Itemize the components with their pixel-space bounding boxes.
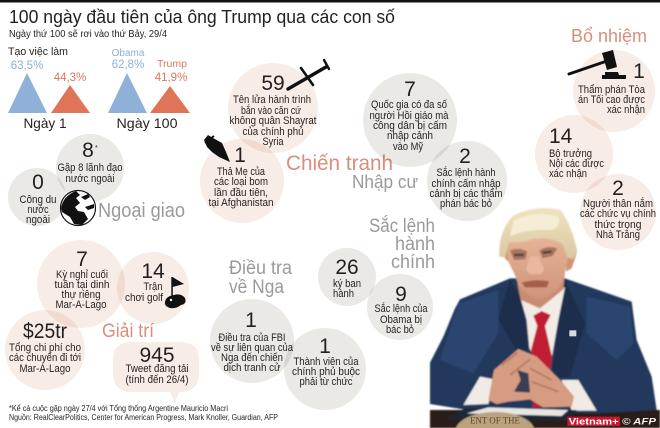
panel: orders signed: hành — [333, 288, 354, 300]
panel: relatives: Nhà Trắng — [596, 228, 640, 241]
desk — [430, 410, 660, 428]
panel: FBI investigation — [210, 299, 294, 383]
footnote and sources: Nguồn: RealClearPolitics, Center for American Progress, Mark Knoller, Guardian, AFP — [9, 413, 278, 422]
heading: executive orders: hành — [395, 234, 435, 255]
panel: blocked orders: Sắc lệnh hành — [436, 166, 496, 179]
panel: foreign trips: ngoài — [26, 214, 50, 226]
panel: Mar-A-Lago cost — [5, 310, 85, 390]
panel: tweets: Tweet đăng tải — [126, 363, 188, 375]
Obama label: Obama — [112, 48, 145, 59]
panel: foreign trips — [8, 168, 66, 226]
day 1 Trump triangle — [51, 85, 90, 113]
panel: immigration ban countries: công dân bị cấm — [373, 120, 447, 132]
panel: foreign trips: Công du — [20, 194, 56, 206]
panel: resigned official: Thành viên của — [294, 356, 359, 368]
chart heading: Tạo việc làm — [8, 46, 68, 58]
panel: supreme court: xác nhận — [607, 104, 645, 116]
panel: supreme court: Thẩm phán Tòa — [578, 84, 646, 96]
suit jacket — [430, 278, 657, 413]
panel: Obama orders reversed — [367, 274, 433, 340]
hair highlight — [510, 214, 559, 236]
title: 100 ngày đầu tiên của ông Trump qua các con số — [9, 7, 395, 27]
panel: cruise missiles: không quân Shayrat — [230, 115, 316, 127]
panel: FBI investigation: Nga đến chiến — [221, 352, 283, 364]
panel: Mother of All Bombs — [200, 139, 284, 223]
panel: cabinet: xác nhận — [549, 168, 587, 180]
panel: relatives: thức trong — [594, 219, 642, 231]
panel: orders signed — [318, 248, 376, 306]
gap between fingers — [514, 370, 530, 393]
panel: Mother of All Bombs: lần đầu tiên, — [214, 187, 268, 199]
panel: Mar-A-Lago cost: $25tr — [23, 320, 67, 343]
necktie — [531, 311, 552, 407]
panel: Obama orders reversed: bác bỏ — [386, 324, 414, 336]
panel: Mar-A-Lago weekends — [37, 240, 125, 328]
panel: blocked orders: cảnh bị các thẩm — [430, 188, 502, 200]
panel: blocked orders: 2 — [459, 145, 471, 168]
presidential seal — [456, 412, 534, 428]
panel: resigned official: phải từ chức — [300, 376, 353, 388]
panel: FBI investigation: 1 — [245, 309, 257, 332]
panel: tweets — [113, 342, 199, 403]
panel: cruise missiles: Syria — [262, 136, 284, 148]
panel: Mar-A-Lago weekends: thự riêng — [62, 289, 100, 301]
left shirt cuff — [463, 377, 495, 405]
lapel pin — [569, 330, 576, 336]
Trump label: Trump — [157, 58, 187, 70]
heading: immigration: Nhập cư — [352, 172, 418, 192]
panel: Mother of All Bombs: tại Afghanistan — [208, 197, 274, 209]
Obama day 1 value: 63,5% — [11, 60, 43, 72]
heading: Russia investigation: về Nga — [229, 277, 284, 298]
icon: globe — [60, 190, 96, 226]
panel: foreign leaders met: * — [95, 145, 98, 152]
panel: cabinet: Bộ trưởng — [549, 148, 592, 160]
neck — [517, 272, 565, 308]
panel: Mar-A-Lago weekends: 7 — [76, 248, 88, 271]
panel: relatives: 2 — [612, 177, 624, 200]
panel: resigned official — [284, 328, 366, 410]
heading: diplomacy: Ngoại giao — [98, 200, 185, 222]
panel: relatives — [580, 174, 656, 250]
heading: Russia investigation — [229, 258, 292, 298]
day 1 Obama triangle — [8, 73, 47, 113]
footnote and sources: *Kể cả cuộc gặp ngày 27/4 với Tổng thống Argentine Mauricio Macri — [9, 404, 228, 413]
panel: Mother of All Bombs: Thả Mẹ của — [217, 166, 266, 178]
Obama day 100 value: 62,8% — [112, 59, 144, 71]
ears — [501, 243, 577, 272]
clasped hands — [488, 349, 574, 407]
panel: golf: Trận — [144, 281, 162, 293]
panel: cabinet: Nội các được — [549, 158, 604, 170]
panel: Mar-A-Lago cost: Tổng chi phí cho — [9, 342, 81, 354]
jacket lapels — [498, 280, 585, 378]
day 100 Trump triangle — [150, 86, 190, 113]
eyes — [514, 252, 552, 255]
panel: supreme court: án Tối cao được — [578, 94, 645, 106]
subtitle: Ngày thứ 100 sẽ rơi vào thứ Bảy, 29/4 — [9, 29, 167, 40]
panel: cruise missiles: 59 — [261, 72, 285, 95]
panel: Mother of All Bombs: các loại bom — [214, 176, 268, 188]
panel: foreign leaders met: nước ngoài — [66, 173, 114, 185]
panel: Obama orders reversed: 9 — [395, 283, 407, 306]
heading: executive orders — [369, 215, 435, 273]
panel: resigned official: chính phủ buộc — [292, 366, 360, 378]
heading: executive orders: chính — [391, 252, 435, 273]
panel: cruise missiles — [228, 63, 318, 153]
Vietnam+ logo: Vietnam+ — [569, 416, 619, 426]
heading: war: Chiến tranh — [286, 152, 393, 175]
Day 100 label: Ngày 100 — [116, 115, 178, 131]
panel: golf: chơi golf — [125, 292, 164, 304]
panel: blocked orders: chính cấm nhập — [432, 178, 500, 190]
panel: foreign leaders met: Gặp 8 lãnh đạo — [58, 162, 122, 174]
panel: Obama orders reversed: Obama bị — [380, 314, 422, 326]
document folder — [447, 408, 577, 421]
sleeve highlights — [440, 290, 633, 373]
hair — [499, 208, 577, 259]
panel: blocked orders: phán bác bỏ — [440, 198, 492, 210]
eye shadows — [510, 247, 557, 260]
panel: FBI investigation: về sự liên quan của — [211, 342, 294, 354]
panel: Mar-A-Lago weekends: tuần tại dinh — [54, 279, 110, 291]
panel: cruise missiles: Tên lửa hành trình — [233, 94, 311, 106]
panel: foreign trips: 0 — [32, 171, 44, 194]
panel: orders signed: 26 — [335, 256, 359, 279]
panel: immigration ban countries: 7 — [404, 78, 416, 101]
panel: cruise missiles: bắn vào căn cứ — [241, 104, 302, 117]
portrait: Donald Trump at desk — [430, 208, 660, 428]
AFP credit: © AFP — [622, 417, 657, 427]
Trump day 1 value: 44,3% — [54, 72, 86, 84]
Day 1 label: Ngày 1 — [24, 115, 67, 131]
panel: immigration ban countries — [363, 73, 457, 167]
document sheet — [467, 407, 568, 416]
panel: tweets: 945 — [139, 344, 175, 367]
icon: golf flag — [165, 277, 186, 308]
right shirt cuff — [562, 380, 597, 411]
panel: tweets: (tính đến 26/4) — [126, 374, 188, 386]
panel: blocked orders — [427, 141, 507, 221]
seal lettering: ENT OF THE — [470, 415, 520, 425]
panel: Mar-A-Lago weekends: Mar-A-Lago — [56, 299, 106, 311]
panel: immigration ban countries: Quốc gia có đa số — [371, 99, 447, 111]
finger creases — [502, 353, 558, 392]
panel: foreign trips: nước — [28, 204, 49, 216]
icon: gavel — [569, 50, 626, 79]
face — [506, 237, 568, 299]
panel: cruise missiles: của chính phủ — [242, 126, 304, 138]
panel: FBI investigation: dịch tranh cử — [224, 362, 281, 374]
mouth — [522, 280, 549, 287]
panel: cabinet: 14 — [549, 125, 573, 148]
nose — [526, 257, 544, 274]
heading: Russia investigation: Điều tra — [229, 258, 292, 279]
heading: executive orders: Sắc lệnh — [369, 215, 435, 237]
Trump day 100 value: 41,9% — [155, 72, 187, 84]
panel: immigration ban countries: người Hồi giáo mà — [370, 110, 449, 122]
panel: resigned official: 1 — [319, 335, 331, 358]
panel: orders signed: ký ban — [333, 278, 361, 290]
panel: supreme court — [573, 50, 655, 132]
panel: foreign leaders met — [56, 134, 124, 202]
panel: Mar-A-Lago cost: các chuyến đi tới — [9, 352, 81, 364]
panel: foreign leaders met: 8 — [82, 139, 94, 162]
panel: golf: 14 — [141, 260, 165, 283]
day 100 Obama triangle — [108, 73, 147, 113]
panel: cabinet — [535, 115, 613, 193]
heading: entertainment: Giải trí — [102, 321, 155, 342]
panel: immigration ban countries: vào Mỹ — [393, 141, 423, 153]
icon: bomb — [204, 135, 230, 162]
icon: cruise missile — [288, 60, 329, 89]
panel: Mar-A-Lago weekends: Kỳ nghỉ cuối — [56, 269, 108, 281]
panel: job creation chart — [8, 46, 190, 131]
footnote and sources — [9, 404, 278, 422]
shirt — [521, 287, 565, 367]
panel: Mar-A-Lago cost: Mar-A-Lago — [20, 363, 70, 375]
heading: appointments: Bổ nhiệm — [571, 26, 647, 46]
panel: immigration ban countries: nhập cảnh — [387, 130, 433, 142]
panel: supreme court: 1 — [633, 60, 645, 83]
red strip — [567, 417, 620, 426]
panel: Mother of All Bombs: 1 — [234, 144, 246, 167]
panel: golf — [117, 252, 189, 324]
panel: Obama orders reversed: Sắc lệnh của — [374, 302, 428, 315]
panel: FBI investigation: Điều tra của FBI — [218, 332, 286, 344]
